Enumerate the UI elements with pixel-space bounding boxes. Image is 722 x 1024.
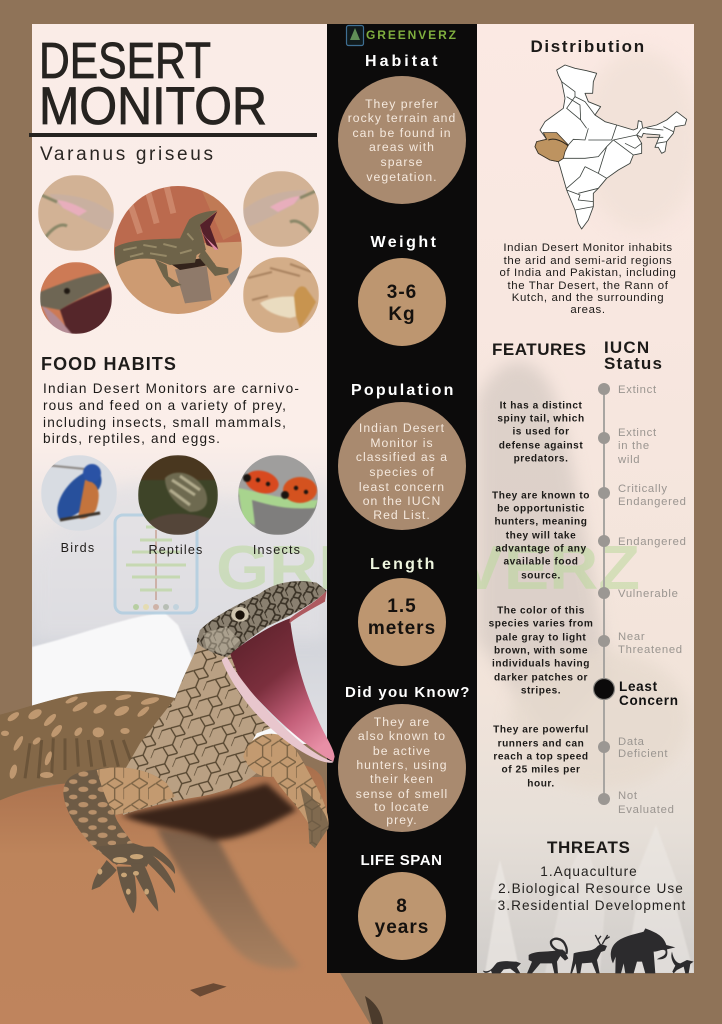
current status label: Concern — [619, 693, 679, 708]
lizard cheek — [203, 627, 240, 655]
panel: population: Indian Desert — [359, 421, 445, 435]
panel: population: species of — [369, 465, 435, 479]
current status label: Least — [619, 679, 658, 694]
heading: IUCN status: Status — [604, 354, 663, 373]
illustration: rock tail shadow — [365, 996, 383, 1024]
text block: feature opportunistic hunters: hunters, meaning — [495, 516, 587, 528]
title: MONITOR — [39, 77, 267, 136]
text block: feature speed: runners and can — [498, 738, 584, 750]
text block: food habits: rous and feed on a variety of prey, — [43, 398, 287, 413]
text block: feature opportunistic hunters: they will take — [506, 530, 576, 542]
panel: habitat: vegetation. — [366, 170, 438, 184]
text block: feature opportunistic hunters: be opportunistic — [497, 504, 585, 514]
chart: IUCN status timeline: Evaluated — [618, 804, 675, 816]
heading: features: FEATURES — [492, 340, 586, 359]
panel: did you know: to locate — [374, 800, 430, 814]
lizard left foot and toes — [92, 843, 175, 913]
photo circle: main lizard on rock — [113, 186, 243, 317]
panel: did you know: Did you Know? — [345, 684, 471, 701]
photo circle: pink lizard left — [38, 175, 114, 251]
panel: did you know: be active — [373, 744, 431, 758]
lizard upper arm scales — [97, 768, 175, 815]
logo: Greenverz — [346, 26, 456, 46]
panel: did you know: hunters, using — [356, 758, 448, 772]
panel: population: on the IUCN — [363, 494, 441, 508]
lizard body spots — [1, 693, 160, 780]
current status label — [619, 679, 679, 708]
lizard upper lip — [289, 591, 327, 623]
text block: feature speed: They are powerful — [493, 724, 589, 736]
text block: feature spiny tail: is used for — [512, 426, 570, 438]
text block: threats: 1.Aquaculture — [540, 864, 638, 879]
lizard body and tail — [0, 691, 190, 800]
panel: habitat: Habitat — [365, 53, 439, 70]
panel: did you know: their keen — [370, 772, 434, 786]
panel: right background — [477, 24, 700, 973]
text block: threats: 2.Biological Resource Use — [498, 881, 684, 896]
panel: length — [358, 556, 446, 666]
heading: threats: THREATS — [547, 838, 631, 857]
text block: distribution: Kutch, and the surrounding — [512, 292, 664, 304]
dark contact shadow — [122, 783, 297, 840]
chart: IUCN status timeline: Endangered — [618, 496, 687, 508]
lizard right foreleg — [243, 734, 329, 848]
photo circle: sandy lizard — [243, 257, 319, 333]
chart: IUCN status timeline: Extinct — [618, 384, 657, 396]
photo circle: reptile — [138, 455, 218, 535]
text block: threats: 3.Residential Development — [498, 898, 686, 913]
forest silhouette — [485, 825, 694, 973]
text block: feature opportunistic hunters: source. — [521, 570, 561, 582]
panel: did you know: They are — [374, 715, 430, 729]
heading: IUCN status: IUCN — [604, 338, 650, 357]
title rule — [29, 133, 317, 137]
photo circle: insects — [238, 455, 318, 535]
panel: life span: 8 — [396, 896, 408, 917]
title: DESERT — [39, 32, 211, 89]
text block: feature colour: The color of this — [497, 606, 585, 616]
text block: feature speed: reach a top speed — [493, 752, 589, 762]
chart: IUCN status timeline: Data — [618, 736, 645, 748]
text block: food habits — [43, 381, 300, 446]
panel: population: Population — [351, 382, 455, 399]
chart: IUCN status timeline: Endangered — [618, 536, 687, 548]
panel: did you know: sense of smell — [356, 787, 448, 801]
panel: habitat — [338, 53, 466, 204]
panel: weight: Kg — [388, 304, 416, 325]
illustration: rock and desert monitor lizard — [0, 581, 370, 1024]
panel: length: 1.5 — [387, 596, 417, 617]
panel: population: classified as a — [356, 450, 448, 464]
text block: feature colour: brown, with some — [494, 646, 588, 656]
panel: weight: Weight — [370, 234, 438, 251]
panel: black centre column — [327, 24, 477, 973]
chart: IUCN status timeline: in the — [618, 440, 650, 452]
icon: monkey — [671, 952, 694, 973]
current status marker — [594, 678, 614, 700]
text block: feature opportunistic hunters: advantage of any — [495, 544, 587, 554]
text block: food habits: Indian Desert Monitors are carnivo- — [43, 381, 300, 396]
text block: feature colour: stripes. — [521, 686, 561, 696]
panel: habitat: can be found in — [352, 126, 452, 140]
text block: feature colour — [489, 606, 593, 696]
text block: food habits: including insects, small mammals, — [43, 415, 287, 430]
heading: distribution: Distribution — [530, 37, 646, 56]
rock — [0, 764, 370, 1024]
text block: feature speed — [493, 724, 589, 790]
text block: feature spiny tail: spiny tail, which — [497, 414, 585, 424]
lizard neck and chest — [113, 630, 275, 815]
icon: big cat — [483, 961, 521, 973]
icon: deer — [570, 935, 610, 973]
text block: feature opportunistic hunters: available food — [503, 556, 579, 568]
subtitle: Varanus griseus — [40, 144, 213, 165]
lizard right claw shading — [300, 787, 328, 848]
text block: distribution: areas. — [570, 304, 606, 316]
text block: distribution: the Thar Desert, the Rann of — [508, 280, 669, 292]
text block: feature spiny tail — [497, 400, 585, 464]
panel: habitat: areas with — [369, 140, 435, 154]
icon: elephant — [611, 928, 675, 973]
panel: population — [338, 382, 466, 530]
text block: feature colour: individuals having — [492, 658, 590, 670]
panel: population: Red List. — [373, 508, 431, 522]
panel: length: Length — [370, 556, 436, 573]
panel: length: meters — [368, 618, 436, 639]
watermark: Greenverz logo — [115, 515, 197, 613]
text block: feature colour: darker patches or — [494, 672, 588, 684]
icon: wildlife silhouettes — [483, 928, 694, 973]
labels: prey names — [61, 541, 301, 557]
text block: feature spiny tail: defense against — [499, 440, 583, 452]
chart: IUCN status timeline: Critically — [618, 483, 668, 495]
chart: IUCN status timeline: Vulnerable — [618, 588, 679, 600]
panel: life span — [358, 852, 446, 960]
lizard mouth — [230, 618, 335, 762]
text block: feature speed: hour. — [527, 778, 555, 790]
text block: feature spiny tail: It has a distinct — [500, 400, 582, 412]
panel: life span: LIFE SPAN — [360, 852, 444, 869]
panel: population: least concern — [359, 480, 445, 494]
lizard head — [197, 581, 327, 657]
heading: IUCN status — [604, 338, 663, 373]
photo circle: lizard head close-up — [40, 262, 112, 334]
text block: distribution: the arid and semi-arid regions — [504, 255, 672, 267]
panel: did you know — [338, 684, 471, 832]
logo: Greenverz: GREENVERZ — [366, 28, 456, 42]
grey shadow band — [157, 828, 300, 969]
panel: habitat: They prefer — [365, 97, 439, 111]
text block: threats — [498, 864, 686, 913]
panel: habitat: sparse — [381, 155, 423, 169]
text block: feature opportunistic hunters: They are known to — [492, 490, 590, 502]
labels: prey names: Birds — [61, 541, 95, 555]
chart: IUCN status timeline: Deficient — [618, 748, 668, 760]
labels: prey names: Reptiles — [148, 543, 204, 557]
lizard left foreleg — [63, 768, 173, 865]
panel: life span: years — [375, 917, 429, 938]
panel: left background — [32, 24, 327, 744]
watermark: Greenverz wordmark: GREENVERZ — [216, 534, 640, 603]
labels: prey names: Insects — [253, 543, 301, 557]
lizard eye — [231, 607, 249, 622]
lizard lower lip — [222, 656, 333, 763]
panel: weight: 3-6 — [387, 282, 417, 303]
text block: feature speed: of 25 miles per — [502, 764, 580, 776]
text block: food habits: birds, reptiles, and eggs. — [43, 431, 221, 446]
heading: food habits: FOOD HABITS — [41, 354, 177, 374]
title — [39, 32, 267, 136]
text block: feature spiny tail: predators. — [514, 454, 568, 464]
panel: did you know: also known to — [358, 729, 446, 743]
chart: IUCN status timeline — [594, 383, 687, 816]
lizard flank ribs — [25, 738, 132, 778]
panel: population: Monitor is — [370, 436, 434, 450]
text block: feature colour: pale gray to light — [496, 632, 586, 644]
text block: distribution: of India and Pakistan, including — [500, 267, 676, 279]
text block: distribution: Indian Desert Monitor inhabits — [503, 242, 673, 254]
photo circle: pink lizard right — [243, 171, 319, 247]
rock cracks — [190, 983, 227, 997]
chart: IUCN status timeline: Threatened — [618, 644, 683, 656]
text block: feature opportunistic hunters — [492, 490, 590, 582]
map: India distribution — [535, 65, 687, 229]
text block: distribution — [500, 242, 676, 316]
chart: IUCN status timeline: Not — [618, 790, 638, 802]
region: Gujarat highlight — [535, 133, 568, 162]
chart: IUCN status timeline: wild — [617, 454, 640, 466]
photo circle: bird — [41, 455, 117, 531]
panel: did you know: prey. — [386, 813, 418, 827]
text block: feature colour: species varies from — [489, 618, 593, 630]
lizard foot spots — [98, 854, 149, 895]
chart: IUCN status timeline: Extinct — [618, 427, 657, 439]
chart: IUCN status timeline: Near — [618, 631, 645, 643]
panel: weight — [358, 234, 446, 346]
panel: habitat: rocky terrain and — [348, 111, 456, 125]
icon: ibex — [527, 939, 568, 973]
